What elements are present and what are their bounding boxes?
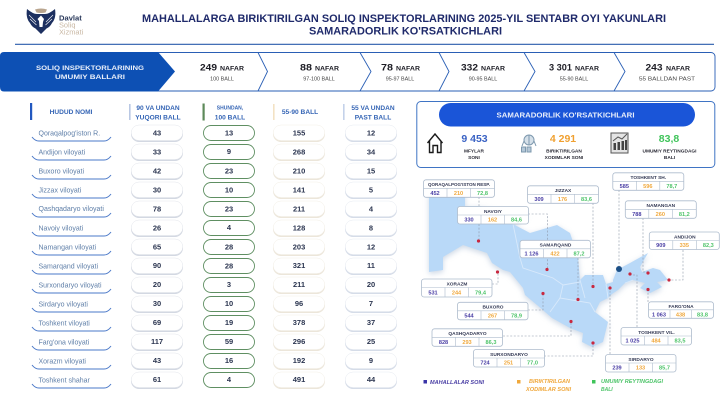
card: Samarqand: 87,2	[574, 252, 584, 258]
card: Surxondaryo: 724	[480, 361, 491, 367]
card: Buxoro: BUXORO	[482, 305, 504, 311]
logo: Xizmati	[59, 28, 84, 36]
card: Buxoro: 267	[488, 313, 497, 319]
banner: below 55: 55 BALLDAN PAST	[639, 76, 696, 82]
card: Sirdaryo	[606, 354, 676, 372]
banner: 90-95 ball: 332	[461, 62, 478, 74]
stat: overall rating: 83,8	[659, 133, 679, 145]
column: 55-90 ball: 203	[293, 242, 305, 252]
card: Toshkent shahar	[613, 173, 684, 190]
legend: BALI	[601, 387, 613, 393]
banner: 97-100 ball	[300, 62, 340, 82]
column: of which 100 ball: 28	[225, 262, 233, 270]
column: 90 and above: 78	[153, 204, 161, 214]
panel: score banner	[0, 52, 715, 92]
column: 55-90 ball	[273, 125, 325, 389]
legend	[424, 379, 664, 393]
banner: 55-90 ball	[549, 62, 600, 82]
card: Navoiy: 84,6	[511, 218, 522, 224]
banner: 55-90 ball: 55-90 BALL	[560, 76, 588, 82]
column: 55-90 ball: 192	[293, 356, 305, 365]
column: 90 and above: 90	[153, 261, 161, 270]
card: Jizzax: 176	[558, 197, 567, 203]
card: Namangan	[625, 201, 696, 218]
banner: below 55: 243	[646, 62, 662, 74]
banner: 100 ball	[200, 62, 245, 82]
column: 55 and below: 11	[367, 261, 375, 270]
card: Navoiy	[458, 206, 528, 224]
table headers: 90 VA UNDAN	[136, 105, 180, 112]
card: Buxoro: 78,9	[511, 313, 522, 319]
column: 90 and above: 26	[153, 224, 161, 232]
card: Qashqadaryo: 828	[439, 340, 448, 346]
stat: assigned staff: XODIMLAR SONI	[545, 155, 584, 161]
card: Namangan: 260	[656, 212, 665, 218]
column: 55 and below: 12	[367, 128, 375, 138]
column: 90 and above	[131, 125, 183, 389]
column: region names: Qashqadaryo viloyati	[38, 206, 104, 213]
column: 55 and below: 25	[367, 337, 375, 346]
logo: Davlat	[59, 14, 82, 22]
column: of which 100 ball: 23	[225, 204, 233, 214]
card: Namangan: NAMANGAN	[647, 203, 676, 209]
card: Xorazm	[422, 279, 492, 297]
title: MAHALLALARGA BIRIKTIRILGAN SOLIQ INSPEKTORLARINING 2025-YIL SENTABR OYI YAKUNLARI	[142, 13, 666, 25]
card: Andijon: 909	[656, 243, 665, 249]
legend: UMUMIY REYTINGDAGI	[601, 379, 664, 385]
panel heading	[439, 103, 695, 126]
banner: 95-97 ball: NAFAR	[396, 66, 421, 72]
title: SAMARADORLIK KO'RSATKICHLARI	[309, 26, 502, 38]
column: 90 and above: 43	[153, 128, 161, 138]
card: Toshkent viloyati: 484	[651, 339, 662, 345]
card: Farg'ona	[648, 302, 714, 318]
column: of which 100 ball: 4	[227, 223, 232, 232]
column: 55-90 ball: 211	[293, 280, 305, 289]
column: region names: Surxondaryo viloyati	[38, 282, 102, 290]
column: 55 and below: 9	[369, 356, 373, 365]
card: Namangan: 81,2	[679, 212, 690, 218]
banner: 97-100 ball: 88	[300, 62, 312, 74]
icon: house	[428, 134, 442, 152]
column: 55 and below: 4	[369, 204, 374, 214]
card: Navoiy: 162	[488, 218, 497, 224]
banner: 90-95 ball	[461, 62, 506, 82]
column: 90 and above: 117	[151, 337, 163, 346]
map region dots	[477, 239, 671, 345]
card: Qoraqalpog'iston: 210	[454, 191, 463, 197]
icon: chart	[611, 133, 628, 153]
column: of which 100 ball: 19	[225, 318, 233, 327]
banner: 90-95 ball: 90-95 BALL	[469, 76, 497, 82]
banner: 55-90 ball: 3 301	[549, 62, 573, 74]
column: 55-90 ball: 96	[295, 299, 303, 308]
card: Sirdaryo: 239	[612, 366, 622, 372]
card: Jizzax: 83,6	[581, 197, 592, 203]
column: 55-90 ball: 491	[293, 375, 305, 384]
table headers: 55-90 BALL	[282, 109, 318, 116]
banner: 97-100 ball: NAFAR	[315, 66, 340, 72]
banner lead: SOLIQ INSPEKTORLARINING	[36, 65, 144, 72]
banner: below 55	[639, 62, 696, 82]
card: Samarqand: 422	[550, 252, 560, 258]
column: region names: Samarqand viloyati	[38, 264, 98, 270]
column: 90 and above: 30	[153, 299, 161, 308]
table headers: 100 BALL	[215, 114, 245, 121]
column: 55-90 ball: 321	[293, 261, 305, 270]
column: 55-90 ball: 155	[293, 128, 305, 138]
card: Farg'ona: 438	[676, 312, 685, 318]
column: 55-90 ball: 378	[293, 318, 305, 327]
legend: XODIMLAR SONI	[525, 387, 572, 393]
stat: overall rating: BALI	[664, 155, 676, 161]
column: 55-90 ball: 268	[293, 148, 305, 156]
card: Farg'ona: FARG'ONA	[668, 304, 694, 310]
stat: mfy count: MFYLAR	[464, 148, 485, 154]
column: 55 and below: 5	[369, 186, 373, 194]
card: Andijon: 82,3	[703, 243, 714, 249]
stat: overall rating: UMUMIY REYTINGDAGI	[642, 148, 697, 154]
column: 90 and above: 33	[153, 148, 161, 156]
banner lead: UMUMIY BALLARI	[55, 74, 125, 81]
column: of which 100 ball: 28	[225, 242, 233, 252]
column: region names: Namangan viloyati	[38, 244, 97, 252]
card: Qoraqalpog'iston	[424, 180, 494, 197]
map of Uzbekistan	[429, 190, 683, 356]
column: region names: Buxoro viloyati	[38, 168, 84, 176]
column: region names: Qoraqalpog'iston R.	[38, 130, 100, 138]
column: 55 and below: 8	[369, 224, 373, 232]
column: region names: Sirdaryo viloyati	[38, 302, 88, 308]
column: 55-90 ball: 210	[293, 166, 305, 176]
column: of which 100 ball: 10	[225, 186, 233, 194]
card: Toshkent viloyati: 1 025	[626, 339, 640, 345]
stat: assigned staff: 4 291	[550, 133, 576, 145]
table headers: HUDUD NOMI	[50, 109, 93, 116]
banner: 90-95 ball: NAFAR	[481, 66, 506, 72]
card: Namangan: 788	[632, 212, 641, 218]
card: Qashqadaryo: 86,3	[486, 340, 496, 346]
card: Jizzax	[528, 186, 598, 203]
column: 55-90 ball: 128	[293, 224, 305, 232]
column: 90 and above: 42	[153, 166, 161, 176]
map connectors	[479, 190, 683, 356]
card: Toshkent viloyati: 83,5	[675, 339, 685, 345]
column: region names: Farg'ona viloyati	[38, 340, 90, 346]
panel: performance indicators	[417, 102, 715, 168]
stat: assigned staff	[545, 133, 584, 161]
column: 55 and below: 15	[367, 166, 375, 176]
column: 55-90 ball: 296	[293, 337, 305, 346]
banner: 55-90 ball: NAFAR	[575, 66, 600, 72]
stat: assigned staff: BIRIKTIRILGAN	[546, 148, 582, 154]
title	[142, 13, 666, 38]
column: 90 and above: 20	[153, 280, 161, 289]
column: region names	[32, 130, 111, 388]
column: of which 100 ball: 23	[225, 166, 233, 176]
card: Farg'ona: 1 063	[652, 312, 666, 318]
column: region names: Toshkent shahar	[38, 378, 91, 384]
banner: 95-97 ball: 95-97 BALL	[386, 76, 414, 82]
banner: 100 ball: 249	[200, 62, 217, 74]
card: Navoiy: 330	[464, 218, 474, 224]
card: Xorazm: XORAZM	[447, 281, 467, 287]
card: Samarqand	[520, 240, 590, 258]
table headers: YUQORI BALL	[135, 114, 181, 121]
column: region names: Jizzax viloyati	[38, 188, 82, 194]
banner: 95-97 ball	[381, 62, 421, 82]
column: of which 100 ball: 10	[225, 299, 233, 308]
card: Xorazm: 79,4	[475, 290, 487, 296]
card: Jizzax: 309	[534, 197, 544, 203]
column: of which 100 ball: 59	[225, 337, 233, 346]
legend: BIRIKTIRILGAN	[529, 379, 570, 385]
table headers: 55 VA UNDAN	[351, 105, 395, 112]
column: 55 and below: 7	[369, 299, 373, 308]
column: 55-90 ball: 141	[293, 186, 305, 194]
table headers: PAST BALL	[355, 114, 391, 121]
column: of which 100 ball: 4	[227, 375, 232, 384]
panel heading: SAMARADORLIK KO'RSATKICHLARI	[496, 112, 635, 120]
column: region names: Xorazm viloyati	[38, 358, 86, 366]
banner: 100 ball: 100 BALL	[210, 76, 234, 82]
card: Surxondaryo: 77,0	[527, 361, 538, 367]
column: 55 and below	[345, 125, 397, 389]
column: region names: Andijon viloyati	[38, 150, 86, 156]
column: 90 and above: 65	[153, 242, 161, 252]
column: region names: Toshkent viloyati	[38, 320, 90, 328]
card: Sirdaryo: 133	[636, 366, 645, 372]
card: Samarqand: 1 126	[524, 252, 538, 258]
column: 90 and above: 61	[153, 375, 161, 384]
card: Toshkent shahar: 596	[643, 184, 652, 190]
column: of which 100 ball: 3	[227, 280, 231, 289]
column: 55 and below: 44	[367, 375, 376, 384]
column: 55 and below: 12	[367, 242, 375, 252]
card: Jizzax: JIZZAX	[555, 188, 572, 194]
card: Xorazm: 531	[428, 290, 438, 296]
card: Andijon: ANDIJON	[674, 234, 696, 240]
stat: mfy count: SONI	[468, 155, 481, 161]
banner lead	[0, 52, 175, 92]
stat: mfy count: 9 453	[461, 133, 488, 145]
column: of which 100 ball: 9	[227, 147, 231, 156]
column: 55 and below: 34	[367, 148, 376, 156]
card: Surxondaryo: SURXONDARYO	[490, 352, 528, 358]
banner: below 55: NAFAR	[666, 66, 691, 72]
column: region names: Navoiy viloyati	[38, 226, 84, 232]
column: 90 and above: 69	[153, 318, 161, 327]
column: 55 and below: 37	[367, 318, 375, 327]
column: 55-90 ball: 211	[293, 204, 305, 214]
card: Qashqadaryo: 293	[462, 340, 472, 346]
card: Sirdaryo: SIRDARYO	[628, 357, 654, 363]
card: Farg'ona: 83,8	[697, 312, 708, 318]
legend: MAHALLALAR SONI	[430, 380, 485, 386]
table headers: SHUNDAN,	[217, 106, 244, 112]
column: of which 100 ball: 16	[225, 356, 233, 365]
table headers	[30, 103, 395, 121]
column: of which 100 ball	[204, 126, 254, 388]
logo: Soliq	[59, 20, 75, 30]
card: Qashqadaryo	[432, 329, 502, 346]
banner: 95-97 ball: 78	[381, 62, 393, 74]
icon: staff network	[522, 135, 536, 152]
card: Toshkent viloyati: TOSHKENT VIL.	[638, 330, 675, 336]
card: Qoraqalpog'iston: 452	[430, 191, 440, 197]
card: Qoraqalpog'iston: QORAQALPOG'ISTON RESP.	[428, 182, 490, 187]
banner: 100 ball: NAFAR	[220, 66, 245, 72]
card: Andijon	[649, 232, 719, 250]
card: Andijon: 335	[680, 243, 689, 249]
card: Toshkent shahar: TOSHKENT SH.	[630, 175, 666, 181]
column: 90 and above: 43	[153, 356, 161, 365]
card: Buxoro: 544	[464, 313, 475, 319]
card: Samarqand: SAMARQAND	[540, 243, 572, 249]
card: Sirdaryo: 85,7	[659, 366, 670, 372]
card: Toshkent viloyati	[621, 328, 692, 345]
column: of which 100 ball: 13	[225, 128, 233, 138]
card: Surxondaryo	[474, 350, 544, 367]
card: Navoiy: NAVOIY	[484, 209, 503, 215]
card: Qashqadaryo: QASHQADARYO	[448, 331, 487, 337]
card: Qoraqalpog'iston: 72,8	[477, 191, 488, 197]
card: Buxoro	[458, 302, 528, 320]
stat: overall rating	[642, 133, 697, 161]
card: Toshkent shahar: 78,7	[666, 184, 677, 190]
banner: 97-100 ball: 97-100 BALL	[303, 76, 335, 82]
logo	[27, 8, 84, 36]
stat: mfy count	[461, 133, 488, 161]
column: 90 and above: 30	[153, 186, 161, 194]
column: 55 and below: 20	[367, 280, 375, 289]
card: Xorazm: 244	[452, 290, 462, 296]
card: Surxondaryo: 251	[504, 361, 513, 367]
card: Toshkent shahar: 585	[620, 184, 629, 190]
